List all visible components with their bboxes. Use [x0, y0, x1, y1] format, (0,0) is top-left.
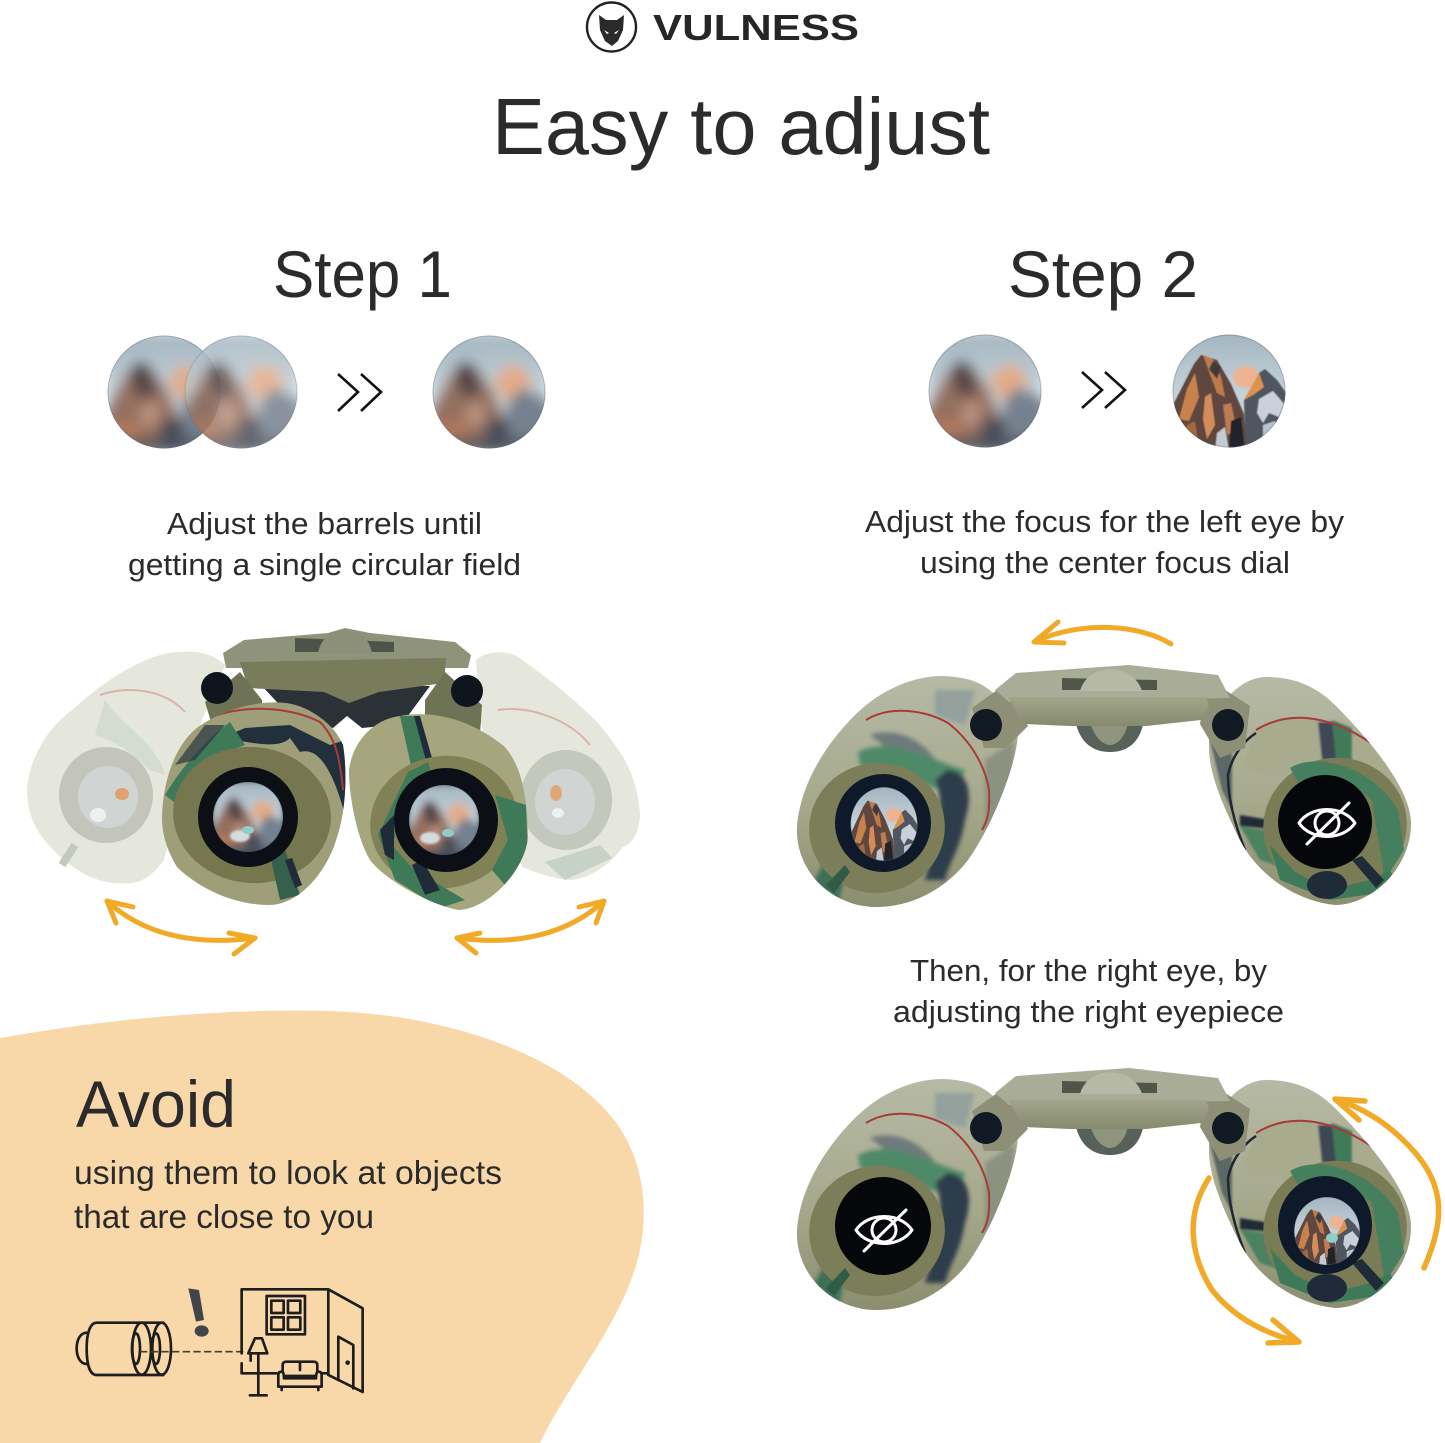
avoid text: using them to look at objects: [74, 1154, 502, 1191]
panel background blob: [0, 1011, 644, 1443]
step 2 sharp circle: [1169, 331, 1289, 451]
arrow: eyepiece rotate upper: [1335, 1099, 1439, 1268]
text: step 2 right eye instruction: adjusting the right eyepiece: [893, 994, 1284, 1029]
text: step 1 instruction: [128, 506, 521, 582]
title: Easy to adjust: [492, 82, 990, 171]
focus dial slots: [295, 638, 394, 652]
step 1 single circle: [429, 332, 551, 454]
left lens covered: [835, 1177, 931, 1275]
right lens ring: [394, 768, 498, 872]
left lens ring: [835, 774, 931, 872]
text: step 1 instruction: Adjust the barrels until: [167, 506, 482, 541]
right lens sharp view: [1292, 1195, 1362, 1267]
arrow: step 1 chevrons: [338, 374, 381, 411]
step 2 binoculars: right eye open: [790, 1068, 1422, 1313]
hinge plate front: [240, 658, 446, 703]
step 1 binoculars: [27, 628, 640, 915]
logo emblem: [587, 2, 636, 52]
hinge knob right: [425, 672, 483, 735]
step 2 binoculars: left eye open: [790, 665, 1422, 910]
text: step 2 left eye instruction: [865, 504, 1345, 580]
icon: window: [267, 1296, 305, 1334]
heading: step 1: Step 1: [273, 237, 452, 311]
icon: eye crossed out: [856, 1210, 912, 1251]
hinge shadow: [262, 686, 430, 728]
avoid text: that are close to you: [74, 1198, 374, 1235]
icon: sofa: [278, 1362, 322, 1390]
hinge knob left: [201, 672, 262, 735]
avoid text: [74, 1154, 502, 1235]
icon: exclamation mark: [188, 1288, 209, 1337]
icon: barrel: [77, 1323, 171, 1375]
icon: floor lamp: [248, 1338, 267, 1395]
arrow: step 1 right barrel swing: [457, 901, 604, 953]
left lens ring: [198, 767, 298, 867]
panel: avoid: [0, 1011, 644, 1443]
arrow: step 2 chevrons: [1082, 372, 1125, 408]
right lens covered: [1278, 775, 1372, 869]
dashed sight line: [140, 1349, 247, 1354]
right lens ring: [1278, 1176, 1372, 1274]
text: step 1 instruction: getting a single circular field: [128, 547, 521, 582]
ghost left barrel: [27, 652, 225, 883]
icon: eye crossed out: [1299, 803, 1355, 844]
left lens blurred view: [211, 780, 286, 855]
text: step 2 left eye instruction: Adjust the focus for the left eye by: [865, 504, 1345, 539]
hinge plate top: [223, 628, 471, 668]
right lens blurred view: [407, 783, 482, 858]
text: step 2 right eye instruction: [893, 953, 1284, 1029]
avoid heading: Avoid: [76, 1067, 236, 1141]
left barrel: [162, 702, 346, 905]
step 1 double vision circles: [104, 332, 303, 454]
arrow: step 2 focus dial direction: [1034, 622, 1171, 644]
icon: room walls: [242, 1289, 363, 1392]
ghost right barrel: [476, 652, 640, 880]
icon: door: [338, 1337, 353, 1388]
arrow: eyepiece rotate lower: [1193, 1178, 1299, 1343]
focus dial cap: [318, 630, 372, 654]
text: step 2 right eye instruction: Then, for the right eye, by: [910, 953, 1268, 988]
step 2 blurred circle: [925, 331, 1047, 453]
logo wordmark: VULNESS: [653, 7, 859, 48]
icon: binocular looking at room: [77, 1288, 363, 1395]
logo: Vulness: [587, 2, 859, 52]
arrow: step 1 left barrel swing: [107, 901, 255, 954]
right barrel: [345, 710, 535, 915]
left lens sharp view: [849, 785, 919, 863]
heading: step 2: Step 2: [1008, 237, 1198, 311]
text: step 2 left eye instruction: using the center focus dial: [920, 545, 1290, 580]
